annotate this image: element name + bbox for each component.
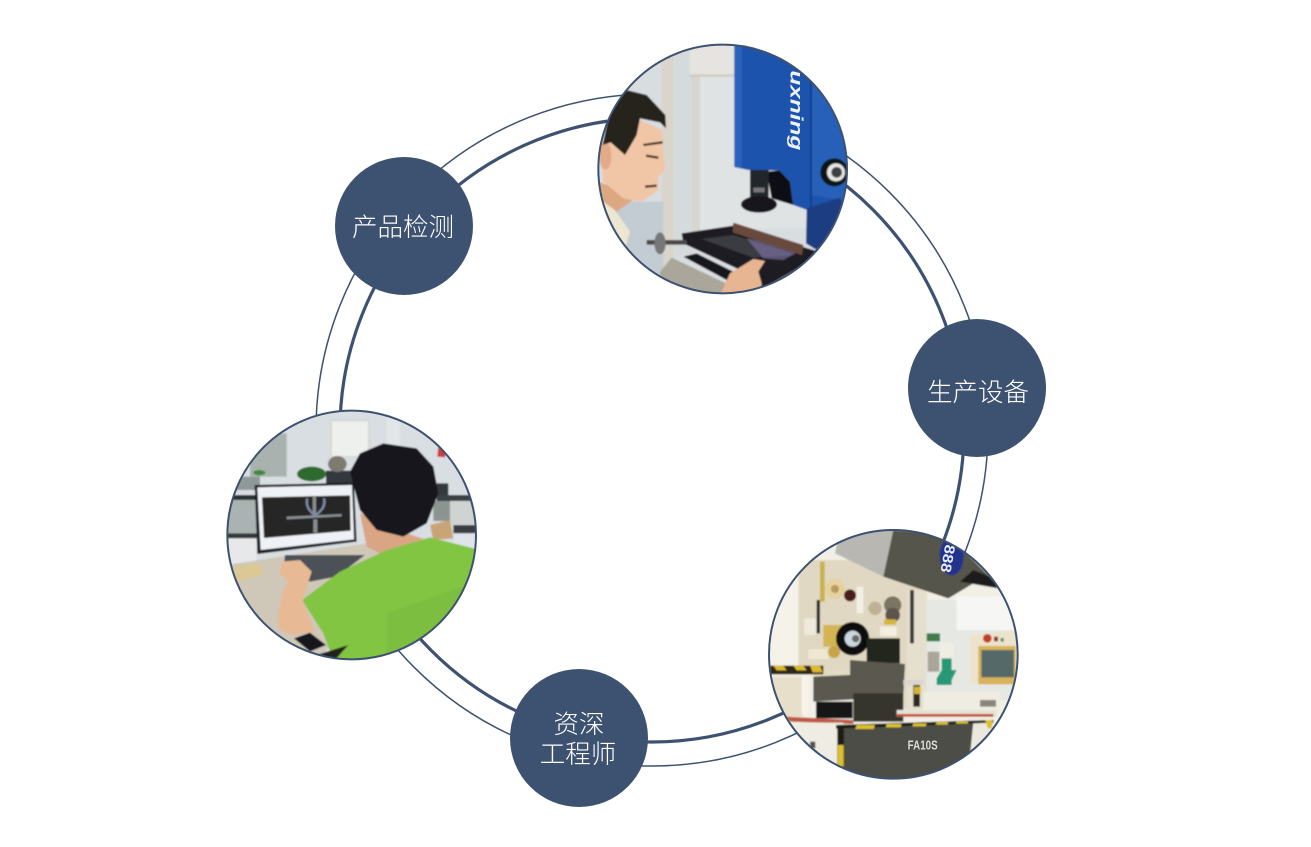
neck xyxy=(600,182,633,212)
photo: wire machine FA10S xyxy=(768,529,1019,780)
shirt xyxy=(604,202,630,246)
far person xyxy=(326,471,356,484)
partitions xyxy=(236,476,261,491)
desk xyxy=(232,543,380,654)
node: senior engineers xyxy=(510,669,648,807)
brand text on machine: uxning xyxy=(787,70,807,150)
badge text: 888 xyxy=(937,543,957,574)
keyboard xyxy=(283,555,365,582)
monitor xyxy=(255,483,357,554)
lens xyxy=(767,170,793,205)
machine panel xyxy=(798,574,907,710)
plant xyxy=(297,467,326,481)
blue column xyxy=(734,46,842,210)
adjuster xyxy=(647,240,687,245)
top grey hood xyxy=(835,530,893,577)
node: product inspection: 产品检测 xyxy=(352,214,454,242)
hand xyxy=(720,258,766,292)
outer thin ring xyxy=(316,94,988,766)
right side xyxy=(928,600,1012,700)
knob xyxy=(820,158,848,186)
hair xyxy=(603,90,666,155)
phone xyxy=(294,633,326,652)
photo: engineer at CAD workstation xyxy=(226,410,477,660)
hazard shelf xyxy=(770,666,823,674)
node: senior engineers: 资深 xyxy=(553,711,605,739)
red ledge + lower xyxy=(785,717,853,724)
black block xyxy=(867,638,900,663)
node: production equipment xyxy=(908,319,1046,457)
person neck xyxy=(360,513,427,557)
photo: operator at measuring machine xyxy=(597,44,848,294)
node: production equipment: 生产设备 xyxy=(927,379,1029,407)
inner thick ring xyxy=(340,118,964,742)
shirt xyxy=(302,536,474,658)
base xyxy=(660,258,726,292)
arm xyxy=(277,560,315,635)
spools xyxy=(825,579,845,599)
node: senior engineers: 工程师 xyxy=(540,741,616,769)
control panel xyxy=(970,630,1018,683)
hair xyxy=(350,443,438,537)
badge xyxy=(940,537,964,575)
node: product inspection xyxy=(335,157,473,295)
machine label: FA10S xyxy=(908,737,938,752)
stage xyxy=(682,226,818,288)
front dark plate xyxy=(842,722,974,778)
face xyxy=(600,120,665,202)
